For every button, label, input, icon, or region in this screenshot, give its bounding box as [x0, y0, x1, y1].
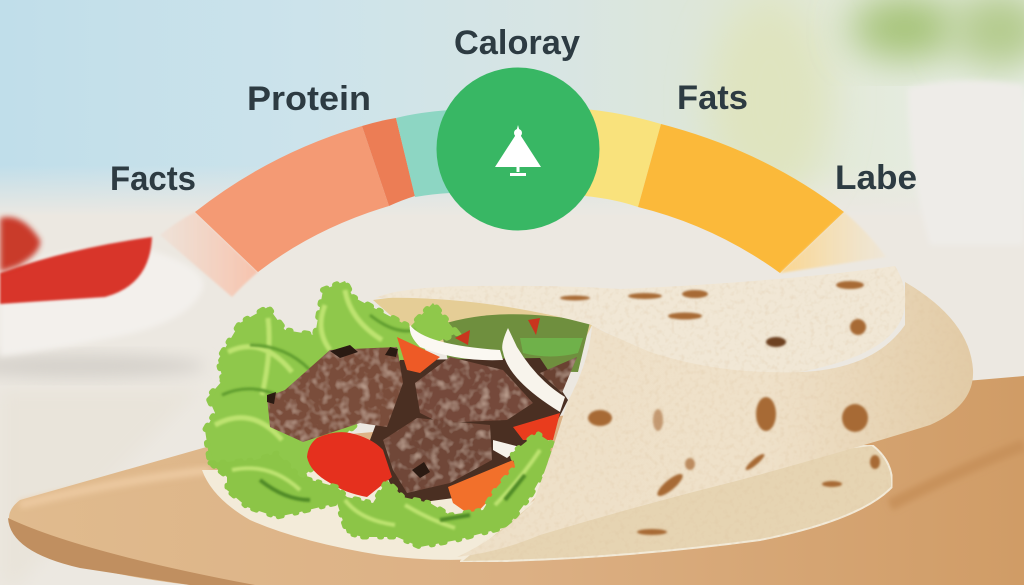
onion slices	[410, 325, 503, 360]
tomato round slice	[307, 432, 392, 497]
wrap: lower tortilla, toasted right part	[460, 445, 892, 562]
dark interior	[370, 358, 568, 505]
label: Labe: Labe	[835, 159, 917, 197]
wrap: top flap	[375, 266, 905, 372]
back red bits	[455, 318, 540, 345]
green calorie circle	[436, 68, 600, 230]
tomato wedge	[448, 460, 517, 517]
arc segment: dark orange	[362, 118, 415, 206]
tomato top	[397, 337, 440, 373]
blurred plate with tomatoes	[0, 217, 205, 378]
label: Caloray: Caloray	[454, 24, 580, 62]
back greens	[440, 314, 590, 372]
icon: white cone tree	[495, 125, 541, 176]
char marks on beef	[267, 345, 430, 478]
wrap filling	[205, 281, 592, 547]
back tortilla inner	[373, 296, 592, 370]
label: Protein: Protein	[247, 80, 371, 118]
front lettuce	[210, 433, 552, 547]
arc segment: faded right	[780, 212, 886, 273]
green pepper	[520, 338, 583, 356]
beef chunks	[267, 347, 577, 493]
front lettuce veins	[232, 450, 540, 528]
arc segment: orange fats	[638, 124, 844, 273]
lettuce back layer	[205, 281, 457, 480]
label: Fats: Fats	[677, 79, 748, 117]
label: Facts: Facts	[110, 160, 196, 198]
tomato right	[513, 413, 560, 440]
wrap: rolled tortilla body	[457, 282, 973, 557]
arc segment: salmon protein	[195, 126, 389, 272]
wooden cutting board	[8, 376, 1024, 585]
wrap: lower tortilla, pale left part	[202, 470, 560, 560]
tortilla char marks	[560, 281, 880, 535]
arc segment: teal	[396, 110, 450, 197]
arc segment: faded left	[160, 212, 258, 297]
lettuce veins	[215, 290, 382, 440]
arc segment: yellow	[585, 109, 661, 207]
nutrition arc gauge	[160, 68, 886, 297]
